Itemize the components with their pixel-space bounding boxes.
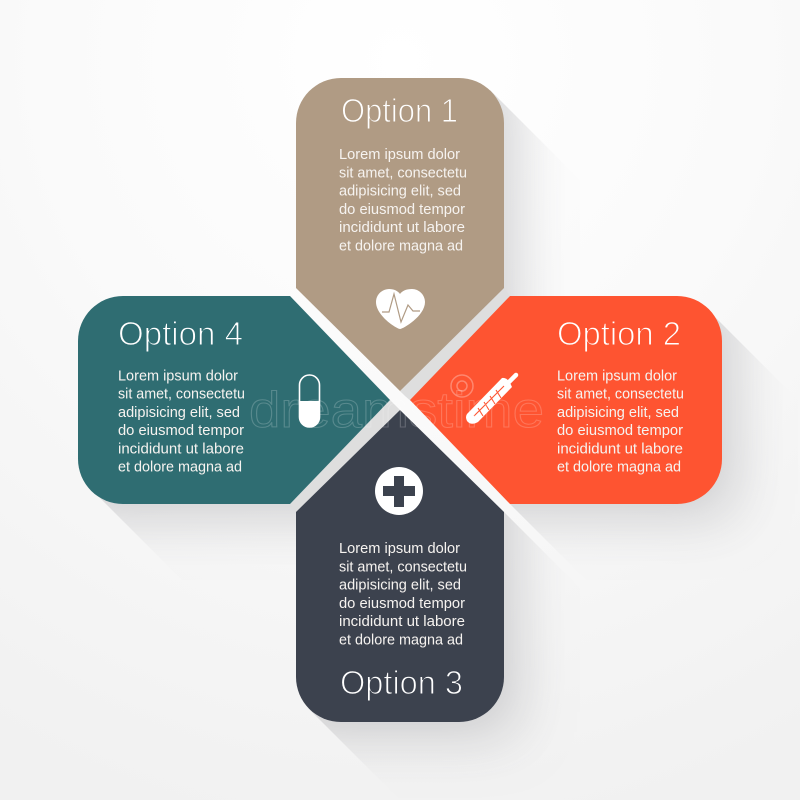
- text block: option 2: sit amet, consectetu: [557, 386, 684, 402]
- text block: option 1: sit amet, consectetu: [339, 166, 467, 182]
- long shadow: option 2 panel: [510, 317, 758, 540]
- text block: option 3: et dolore magna ad: [339, 632, 463, 648]
- text block: option 3: incididunt ut labore: [339, 614, 465, 630]
- text block: option 1: [339, 147, 467, 254]
- text block: option 3: [339, 541, 467, 648]
- panel: option 4: [78, 296, 390, 504]
- watermark: dreamstime: [249, 382, 544, 438]
- text block: option 4: et dolore magna ad: [118, 460, 242, 476]
- text block: option 2: adipisicing elit, sed: [557, 405, 679, 421]
- text block: option 4: Lorem ipsum dolor: [118, 368, 238, 384]
- text block: option 2: do eiusmod tempor: [557, 423, 683, 439]
- text block: option 1: do eiusmod tempor: [339, 202, 465, 218]
- icon: pill: [299, 375, 320, 428]
- text block: option 4: sit amet, consectetu: [118, 386, 245, 402]
- gap shade between option 1 and option 2: [400, 288, 510, 400]
- panel: option 1: [296, 78, 504, 391]
- text block: option 3: sit amet, consectetu: [339, 560, 467, 576]
- heading: option 1: Option 1: [341, 92, 458, 129]
- text block: option 2: Lorem ipsum dolor: [557, 368, 677, 384]
- text block: option 4: [118, 368, 245, 476]
- panel: option 2: [410, 296, 722, 504]
- panel: option 3: [296, 410, 504, 722]
- heading: option 4: Option 4: [118, 315, 243, 352]
- long shadow: option 3 panel: [310, 512, 540, 758]
- heading: option 3: Option 3: [340, 664, 463, 701]
- long shadow: option 4 panel: [99, 497, 296, 540]
- icon: thermometer: [466, 375, 516, 424]
- text block: option 3: do eiusmod tempor: [339, 596, 465, 612]
- text block: option 1: et dolore magna ad: [339, 238, 463, 254]
- text block: option 2: [557, 368, 684, 476]
- text block: option 2: et dolore magna ad: [557, 460, 681, 476]
- icon: heart with pulse: [376, 289, 425, 329]
- text block: option 3: adipisicing elit, sed: [339, 578, 461, 594]
- text block: option 1: Lorem ipsum dolor: [339, 147, 460, 163]
- gap shade between option 4 and option 3: [290, 400, 400, 512]
- icon: medical cross: [375, 467, 423, 515]
- text block: option 1: adipisicing elit, sed: [339, 184, 461, 200]
- heading: option 2: Option 2: [557, 315, 681, 352]
- text block: option 4: incididunt ut labore: [118, 442, 244, 458]
- text block: option 1: incididunt ut labore: [339, 220, 465, 236]
- text block: option 3: Lorem ipsum dolor: [339, 541, 460, 557]
- text block: option 4: adipisicing elit, sed: [118, 405, 240, 421]
- text block: option 2: incididunt ut labore: [557, 442, 683, 458]
- text block: option 4: do eiusmod tempor: [118, 423, 244, 439]
- long shadow: option 1 panel: [400, 90, 540, 401]
